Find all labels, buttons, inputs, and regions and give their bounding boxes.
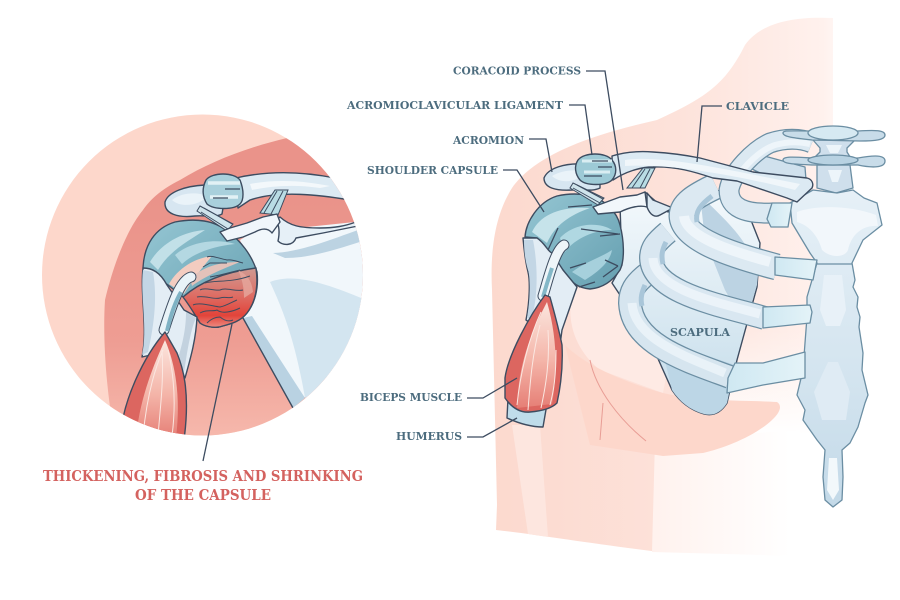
- label: humerus: HUMERUS: [396, 429, 462, 443]
- coracoid process: [593, 192, 647, 214]
- panel: shoulder anatomy with body silhouette: [492, 18, 885, 556]
- rib one: [729, 139, 812, 213]
- upper humerus: [523, 238, 577, 345]
- label: acromion: ACROMION: [452, 133, 524, 147]
- biceps tendon close-up: [164, 277, 191, 331]
- sternum: [790, 190, 882, 507]
- label: scapula: SCAPULA: [670, 325, 731, 339]
- label: biceps muscle: BICEPS MUSCLE: [360, 390, 462, 404]
- label: shoulder capsule: SHOULDER CAPSULE: [367, 163, 498, 177]
- coracoid hook: [647, 193, 673, 216]
- label: coracoid process: CORACOID PROCESS: [453, 64, 581, 78]
- acromioclavicular ligament: [576, 154, 616, 184]
- label: acromioclavicular ligament: ACROMIOCLAVICULAR LIGAMENT: [346, 98, 563, 112]
- biceps muscle close-up: [120, 332, 186, 440]
- coracoacromial ligaments: [570, 168, 655, 205]
- rib one upper stub: [752, 157, 806, 188]
- acromioclavicular ligament close-up: [203, 174, 243, 208]
- vertebrae: [783, 126, 885, 193]
- leader lines: [467, 71, 722, 437]
- clavicle: [612, 152, 813, 202]
- costal cartilages: [727, 203, 817, 393]
- humerus shaft lower: [507, 398, 548, 427]
- lower torso light area: [652, 430, 800, 556]
- circle skin background: [40, 112, 366, 438]
- upper humerus close-up: [142, 268, 197, 378]
- coracoid hook close-up: [276, 217, 358, 244]
- panel: close-up circle of frozen shoulder: [40, 112, 370, 440]
- acromion close-up: [165, 185, 226, 216]
- callout: capsule pathology: OF THE CAPSULE: [135, 487, 271, 504]
- shoulder capsule: [525, 194, 623, 289]
- rib three: [651, 232, 765, 318]
- callout: capsule pathology: [43, 468, 363, 504]
- fibrosis wrinkle lines: [193, 256, 250, 323]
- capsule with fibrosis: [143, 220, 257, 327]
- body crease lines: [590, 360, 646, 441]
- scapula close-up: [240, 215, 366, 408]
- deep tissue background: [104, 120, 370, 440]
- coracoid process close-up: [220, 214, 280, 241]
- biceps tendon: [543, 245, 564, 297]
- label: clavicle: CLAVICLE: [726, 99, 789, 113]
- rib two: [682, 186, 777, 267]
- lower back shadow tail: [565, 345, 780, 456]
- inner arm highlight: [512, 425, 548, 537]
- biceps muscle: [505, 295, 562, 412]
- leader line for capsule callout: [203, 324, 232, 461]
- rib four: [630, 274, 730, 377]
- callout: capsule pathology: THICKENING, FIBROSIS AND SHRINKING: [43, 468, 363, 485]
- lower right body fade: [700, 330, 870, 442]
- scapula: [612, 190, 760, 415]
- body silhouette: [492, 18, 860, 552]
- acromion: [544, 164, 600, 190]
- underarm pale region: [570, 250, 690, 393]
- coracoacromial ligaments close-up: [197, 190, 288, 231]
- clavicle close-up: [236, 173, 350, 208]
